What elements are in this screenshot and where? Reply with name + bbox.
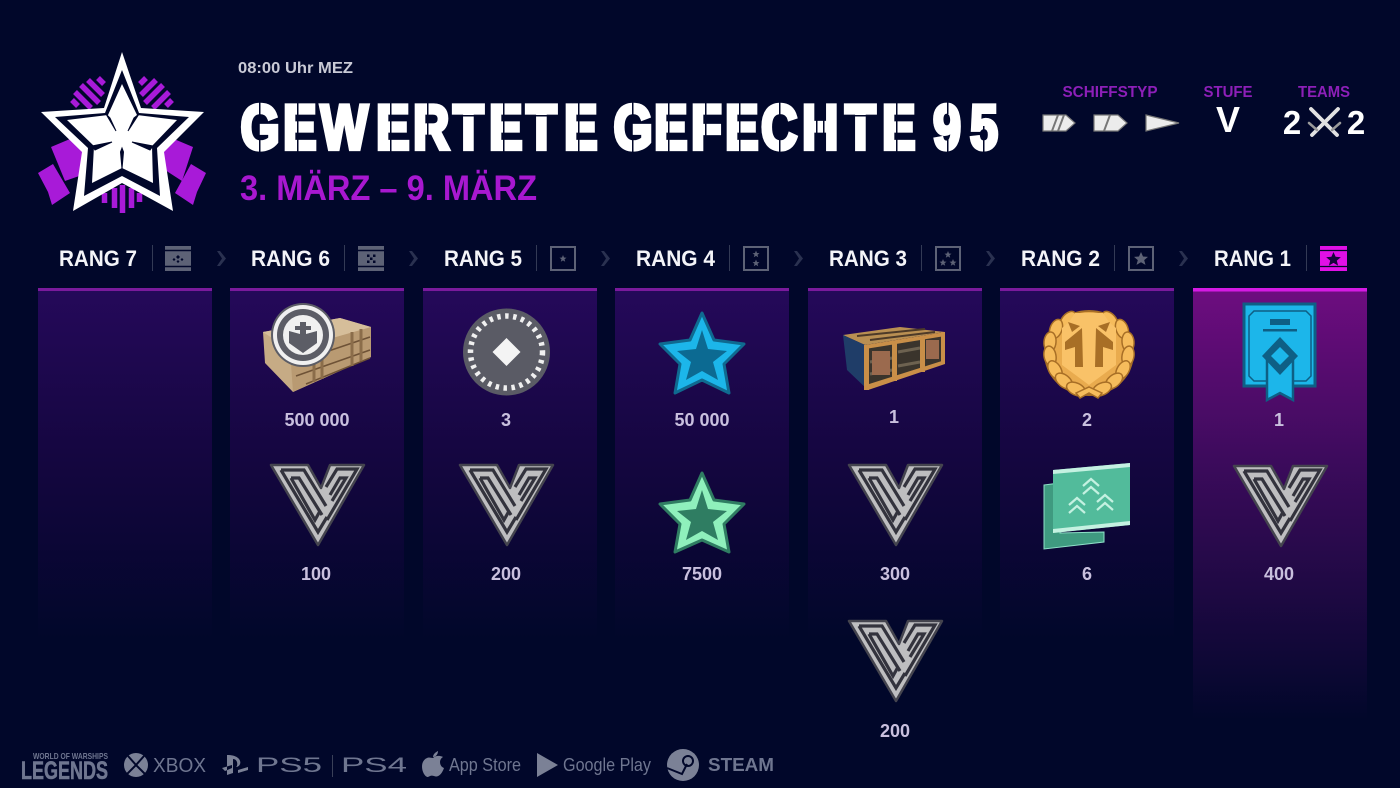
tier block: [1204, 84, 1252, 140]
logo: World of Warships Legends: [21, 751, 108, 785]
rank header: Rang 7: RANG 7: [59, 246, 137, 271]
ship type block: SCHIFFSTYP: [1062, 84, 1158, 101]
ship type block: [1043, 84, 1179, 131]
teams block: 2: [1347, 104, 1365, 141]
panel: rang 6: [230, 288, 404, 640]
arrow: [794, 251, 803, 266]
panel: rang 1: 1: [1274, 410, 1284, 430]
icon: gold laurel badge: [1042, 308, 1136, 399]
title: GEWERTETE GEFECHTE 95: [240, 93, 998, 163]
icon: V emblem: [1234, 466, 1327, 546]
tier block: V: [1216, 99, 1240, 140]
logo: PS5 PS4: [222, 754, 408, 777]
panel: rang 5: [423, 288, 597, 640]
logo: App Store: App Store: [449, 755, 521, 775]
logo: PS5 PS4: PS4: [341, 754, 408, 777]
panel: rang 2: [1000, 288, 1174, 640]
logo: Google Play: [537, 753, 651, 777]
icon: V emblem: [849, 621, 942, 701]
rank header: Rang 6: [251, 245, 384, 271]
arrow: [601, 251, 610, 266]
icon: crossed swords: [1309, 109, 1340, 135]
panel: rang 5: 3: [501, 410, 511, 430]
date range: 3. MÄRZ – 9. MÄRZ: [240, 169, 537, 208]
logo: PS5 PS4: PS5: [256, 754, 322, 777]
icon: V emblem: [849, 465, 942, 545]
panel: rang 3: 1: [889, 407, 899, 427]
panel: rang 2: 2: [1082, 410, 1092, 430]
logo: Xbox: [124, 753, 206, 777]
logo: star emblem: [38, 52, 206, 213]
panel: rang 3: [808, 288, 982, 640]
panel: rang 1: [1193, 288, 1367, 720]
value: 200: [880, 721, 910, 741]
teams block: 2: [1283, 104, 1301, 141]
icon: wooden chest: [843, 327, 945, 390]
panel: rang 3: 300: [880, 564, 910, 584]
panel: rang 5: 200: [491, 564, 521, 584]
icon: gray token: [463, 308, 550, 396]
icon: ship type 1: [1043, 115, 1075, 131]
panel: rang 2: 6: [1082, 564, 1092, 584]
arrow: [217, 251, 226, 266]
panel: rang 4: 50 000: [674, 410, 730, 430]
icon: ship type 3: [1146, 115, 1179, 131]
rank header: Rang 3: RANG 3: [829, 246, 907, 271]
tier block: STUFE: [1204, 84, 1252, 101]
teams block: TEAMS: [1298, 84, 1350, 101]
rank header: Rang 1: [1214, 245, 1347, 271]
logo: World of Warships Legends: WORLD OF WARSHIPS: [33, 751, 108, 761]
panel: rang 6: 100: [301, 564, 331, 584]
panel: rang 6: 500 000: [284, 410, 350, 430]
rank header: Rang 4: [636, 245, 768, 271]
logo: Google Play: Google Play: [563, 755, 651, 775]
arrow: [409, 251, 418, 266]
teams block: [1283, 84, 1365, 141]
footer: platform logos: [21, 749, 774, 785]
icon: ship type 2: [1094, 115, 1127, 131]
arrow: [1179, 251, 1188, 266]
rank header: Rang 1: RANG 1: [1214, 246, 1291, 271]
icon: green star: [660, 473, 744, 552]
logo: App Store: [422, 751, 521, 777]
panel: rang 4: 7500: [682, 564, 722, 584]
panel: rang 1: 400: [1264, 564, 1294, 584]
icon: blue certificate: [1244, 304, 1315, 400]
rank header: Rang 5: [444, 245, 575, 271]
rank header: Rang 2: RANG 2: [1021, 246, 1100, 271]
rank header: Rang 4: RANG 4: [636, 246, 716, 271]
rank header: Rang 2: [1021, 245, 1153, 271]
icon: V emblem: [271, 465, 364, 545]
icon: V emblem: [460, 465, 553, 545]
icon: green flags: [1044, 463, 1130, 549]
icon: wooden crate with coin: [263, 303, 371, 392]
logo: Steam: [667, 749, 774, 781]
panel: rang 4: [615, 288, 789, 640]
logo: Steam: STEAM: [708, 755, 774, 775]
rank header: Rang 6: RANG 6: [251, 246, 330, 271]
time label: 08:00 Uhr MEZ: [238, 60, 354, 77]
rank header: Rang 5: RANG 5: [444, 246, 522, 271]
rank header: Rang 3: [829, 245, 960, 271]
panel: rang 7: [38, 288, 212, 640]
logo: World of Warships Legends: LEGENDS: [21, 757, 108, 785]
icon: blue star: [660, 313, 744, 393]
arrow: [986, 251, 995, 266]
rank header: Rang 7: [59, 245, 191, 271]
logo: Xbox: XBOX: [153, 755, 206, 777]
